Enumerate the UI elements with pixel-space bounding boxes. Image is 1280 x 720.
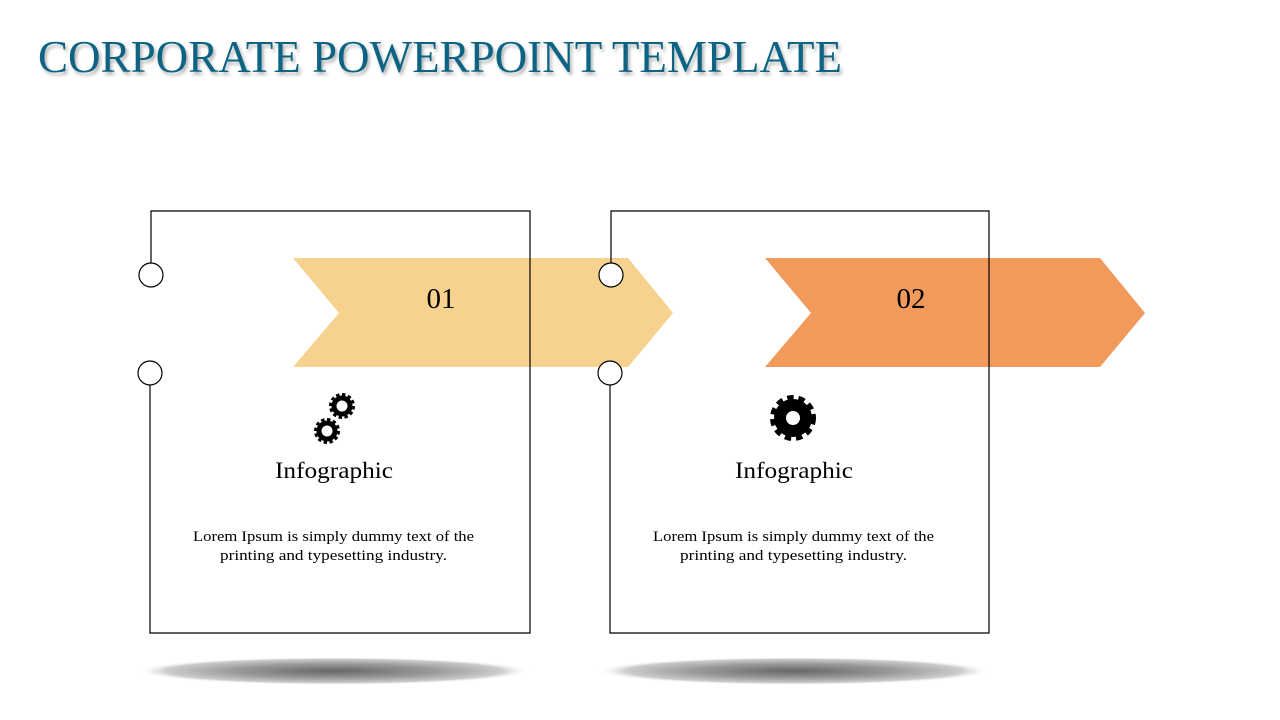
text block 2: printing and typesetting industry. xyxy=(680,548,907,564)
shadow 2 xyxy=(596,657,992,685)
text block 1: Lorem Ipsum is simply dummy text of the xyxy=(193,529,474,545)
title: CORPORATE POWERPOINT TEMPLATE xyxy=(38,31,842,82)
text block 2 xyxy=(653,529,934,564)
text block 1 xyxy=(193,529,474,564)
arrow 01 xyxy=(293,258,673,367)
text block 2: Lorem Ipsum is simply dummy text of the xyxy=(653,529,934,545)
heading 2: Infographic xyxy=(735,458,853,483)
text block 1: printing and typesetting industry. xyxy=(220,548,447,564)
arrow 02: 02 xyxy=(896,283,926,315)
arrow 01: 01 xyxy=(426,283,456,315)
panel 2 frame xyxy=(598,211,989,633)
arrow 02 xyxy=(765,258,1145,367)
panel 1 frame xyxy=(138,211,530,633)
icon: gear xyxy=(774,399,812,437)
icon: two gears xyxy=(317,396,352,441)
shadow 1 xyxy=(136,657,532,685)
heading 1: Infographic xyxy=(275,458,393,483)
